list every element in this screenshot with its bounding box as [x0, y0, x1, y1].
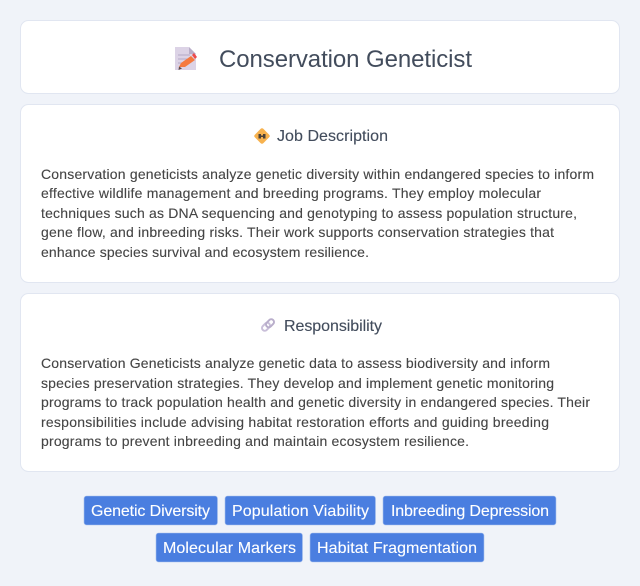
tag: molecular markers: [156, 533, 302, 562]
icon: document with pencil: [175, 47, 197, 70]
panel: responsibility: [20, 294, 620, 472]
heading: responsibility: Responsibility: [284, 318, 382, 335]
text block: responsibility: [41, 355, 590, 449]
text block: job description: techniques such as DNA sequencing and genotyping to assess population structure,: [41, 205, 577, 221]
text block: job description: gene flow, and inbreeding risks. Their work supports conservation strategies that: [41, 224, 554, 240]
text block: responsibility: responsibilities include advising habitat restoration efforts and guiding breeding: [41, 414, 549, 430]
tag: inbreeding depression: Inbreeding Depression: [391, 503, 549, 520]
text block: responsibility: programs to prevent inbreeding and maintain ecosystem resilience.: [41, 433, 469, 449]
text block: job description: [41, 166, 594, 260]
tag: population viability: [225, 496, 376, 525]
text block: job description: effective wildlife management and breeding programs. They employ molecular: [41, 185, 541, 201]
panel: job description: [20, 104, 620, 282]
text block: responsibility: programs to track population health and genetic diversity in endangered species. Their: [41, 394, 590, 410]
tag: habitat fragmentation: Habitat Fragmentation: [317, 540, 477, 557]
text block: job description: enhance species survival and ecosystem resilience.: [41, 244, 369, 260]
tags: [84, 496, 556, 562]
panel: title card: [20, 20, 620, 94]
tag: molecular markers: Molecular Markers: [163, 540, 296, 557]
tag: habitat fragmentation: [310, 533, 484, 562]
icon: orange diamond: [254, 128, 270, 144]
tag: genetic diversity: [84, 496, 218, 525]
tag: inbreeding depression: [383, 496, 556, 525]
tag: population viability: Population Viability: [232, 503, 369, 520]
text block: responsibility: Conservation Geneticists analyze genetic data to assess biodiversity and inform: [41, 355, 550, 371]
heading: job description: Job Description: [277, 128, 388, 145]
text block: responsibility: species preservation strategies. They develop and implement genetic monitoring: [41, 375, 554, 391]
text block: job description: Conservation geneticists analyze genetic diversity within endangered species to inform: [41, 166, 594, 182]
tag: genetic diversity: Genetic Diversity: [91, 503, 210, 520]
title: Conservation Geneticist: [219, 46, 472, 73]
icon: chain link: [261, 318, 275, 332]
